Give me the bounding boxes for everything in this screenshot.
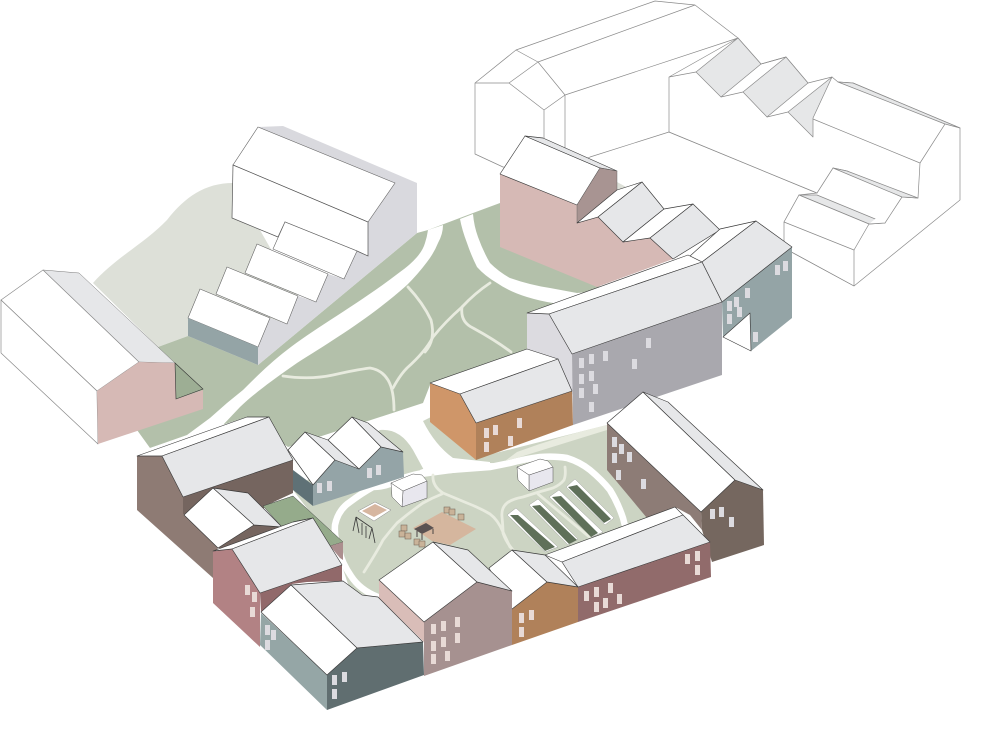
building: grey tall block	[527, 255, 722, 425]
grey roof	[512, 550, 578, 587]
front wall	[232, 165, 368, 256]
orange wall	[512, 582, 578, 645]
swing	[353, 517, 375, 543]
building: long red block	[545, 507, 711, 622]
building: small orange house	[489, 550, 578, 645]
side and back roof	[258, 126, 417, 365]
orange gable wall	[430, 383, 476, 460]
grey roof	[460, 359, 572, 423]
roof sliver front dormer	[799, 195, 885, 224]
windows	[584, 551, 700, 612]
grey roof one	[598, 182, 664, 242]
white roof	[607, 392, 735, 512]
white roof	[1, 270, 139, 391]
building: brown east block	[607, 392, 764, 562]
grey roof slope	[43, 270, 175, 363]
white roof sliver	[213, 518, 313, 551]
mauve gable	[577, 168, 617, 223]
ground: main diagonal white path	[150, 225, 443, 457]
pergola	[414, 523, 434, 540]
grey roof two	[650, 204, 720, 259]
building: blue grey house north east	[690, 221, 792, 351]
white roof	[545, 507, 683, 562]
grey roof	[213, 488, 282, 527]
park footpaths	[283, 283, 511, 410]
white roof sliver	[137, 417, 269, 456]
building: orange house	[430, 349, 573, 460]
windows	[484, 418, 522, 452]
main roof	[233, 127, 395, 222]
building: mauve house	[379, 542, 512, 676]
bed four	[566, 479, 614, 525]
courtyard white ring road	[335, 457, 625, 597]
white roof	[500, 136, 600, 205]
white roof	[261, 585, 357, 675]
building: pink stepped house	[500, 136, 720, 287]
red wall	[578, 542, 711, 622]
dark wedge under roof	[218, 525, 282, 549]
brown gable wall	[137, 456, 218, 578]
roof sliver middle dormer	[833, 168, 918, 198]
bed one	[507, 508, 558, 552]
blue base band	[188, 318, 258, 365]
brown long wall	[607, 423, 702, 530]
white roof	[430, 349, 558, 394]
grey roof	[562, 515, 710, 587]
building: twin blue house	[288, 417, 404, 506]
white roof one	[288, 432, 335, 485]
pink gable wall	[97, 362, 203, 444]
roof segment, grey dormer one	[696, 38, 761, 97]
building: white terrace block with dormers	[188, 126, 417, 365]
white roof	[184, 488, 254, 548]
ground: main green park	[120, 203, 600, 448]
dormer four	[188, 289, 270, 347]
grey roof	[291, 581, 423, 648]
building: dark blue corner house	[260, 581, 424, 710]
roof segment, grey dormer three	[788, 77, 832, 137]
green yard	[263, 496, 343, 546]
building: big brown west block	[137, 417, 293, 578]
brown gable wall	[701, 480, 764, 562]
shed east	[517, 459, 553, 491]
pink wall	[500, 174, 673, 287]
grey main wall	[572, 302, 722, 425]
plaza	[413, 512, 476, 545]
grey roof	[549, 262, 722, 354]
grey roof	[643, 392, 763, 490]
white step one	[577, 182, 642, 223]
white roof two	[328, 417, 381, 469]
windows	[265, 625, 347, 699]
pale gable wall	[527, 313, 573, 395]
windows	[245, 585, 257, 617]
windows	[612, 437, 734, 527]
ground: pale green patch behind pink house	[617, 182, 628, 192]
grey roof one	[305, 432, 359, 469]
ground: curved white path to the east	[460, 214, 590, 310]
windows	[727, 261, 788, 342]
garden beds	[507, 479, 614, 552]
blue wall	[313, 447, 404, 506]
blue side wall	[260, 613, 327, 710]
white roof	[379, 542, 477, 622]
grey roof	[702, 221, 792, 302]
white step	[690, 221, 756, 262]
building: red house	[213, 518, 343, 647]
orange long wall	[476, 391, 573, 460]
pale pink side wall	[379, 580, 424, 642]
mauve strip	[330, 542, 343, 560]
white step two	[623, 204, 693, 242]
grey roof two	[352, 417, 403, 452]
windows	[317, 465, 381, 493]
outlined building top right	[475, 1, 960, 286]
grey roof	[433, 542, 512, 591]
ground: pale green lawn behind terraces	[93, 183, 300, 365]
opening	[723, 313, 751, 351]
white side wall	[1, 300, 98, 444]
dark brown long wall	[183, 460, 293, 547]
roof sliver	[525, 136, 617, 171]
dark blue side	[293, 470, 313, 506]
dormer three	[216, 267, 298, 324]
courtyard footpaths	[364, 425, 607, 572]
white roof sliver	[527, 255, 702, 314]
roof segment, grey dormer two	[743, 57, 808, 117]
windows	[579, 338, 651, 412]
building: white west block with pink gable	[1, 270, 203, 444]
red gable wall	[213, 549, 260, 647]
grey roof	[232, 518, 342, 593]
bed three	[549, 490, 603, 537]
bed two	[529, 499, 578, 545]
dark gable wall	[327, 642, 424, 710]
dark red wall	[260, 565, 342, 612]
mauve wall	[424, 582, 512, 676]
dormer one	[273, 222, 357, 279]
roof sliver east wing	[838, 82, 960, 128]
blue wall	[722, 247, 792, 351]
small white gable house	[184, 488, 282, 549]
windows	[431, 617, 460, 664]
green triangle	[175, 363, 203, 399]
dormer two	[245, 244, 328, 302]
courtyard ground, main	[293, 430, 650, 600]
grey roof	[162, 417, 293, 497]
gable front dormer	[784, 195, 869, 250]
sandbox	[358, 502, 391, 521]
crates	[399, 507, 464, 547]
shed west	[391, 474, 427, 507]
courtyard ground, north strip	[423, 417, 610, 470]
windows	[519, 610, 534, 637]
white roof	[489, 550, 547, 609]
